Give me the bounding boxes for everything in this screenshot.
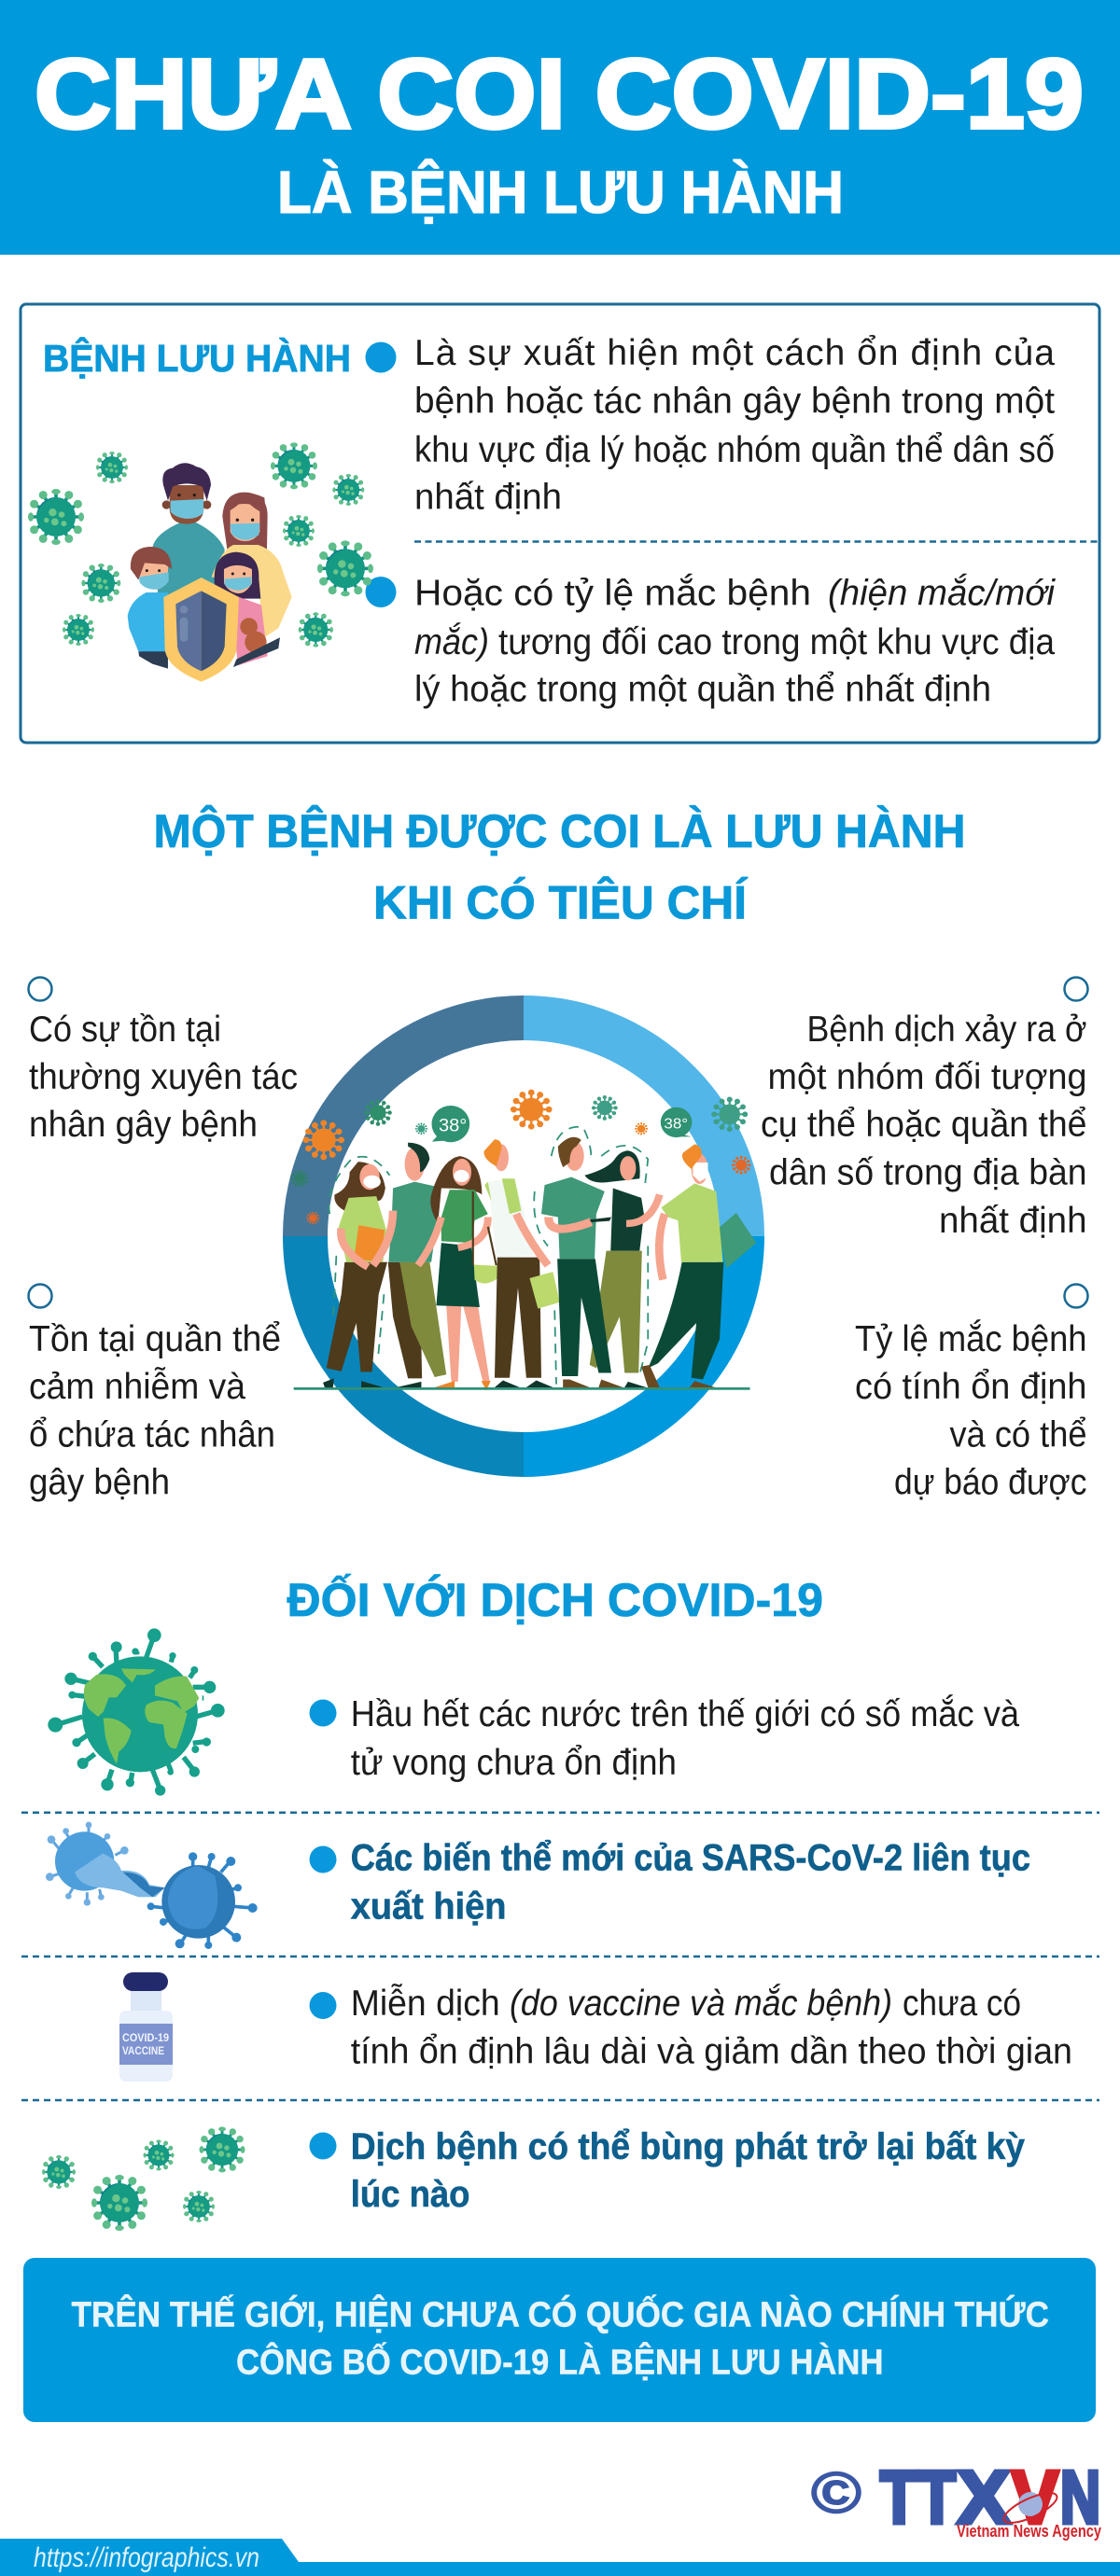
bullet and text: row 2	[310, 1838, 1030, 1927]
text block: definition 1: khu vực địa lý hoặc nhóm quần thể dân số	[414, 430, 1055, 470]
subtitle: LÀ BỆNH LƯU HÀNH	[277, 158, 844, 226]
criterion: bottom left: Tồn tại quần thể	[29, 1319, 281, 1359]
callout: conclusion	[23, 2258, 1096, 2422]
panel: definition of endemic disease	[21, 304, 1099, 743]
ring chart: four quadrants	[305, 1018, 742, 1455]
criterion: top left: Có sự tồn tại	[29, 1010, 221, 1050]
text block: definition 2: tương đối cao trong một khu vực địa	[498, 622, 1055, 662]
person 2	[373, 1143, 446, 1387]
heading: bệnh lưu hành: BỆNH LƯU HÀNH	[43, 337, 351, 380]
person 3	[418, 1156, 498, 1390]
text block: definition 2: Hoặc có tỷ lệ mắc bệnh	[414, 573, 811, 614]
bullet and text: row 1: tử vong chưa ổn định	[351, 1743, 677, 1783]
text block: definition 1	[414, 333, 1055, 517]
bullet 2	[366, 577, 396, 607]
fever bubble 1: 38°	[439, 1116, 467, 1135]
wordmark: V	[1012, 2456, 1058, 2539]
bullet and text: row 4: lúc nào	[351, 2174, 470, 2215]
header banner	[0, 0, 1120, 255]
icon: vaccine bottle	[119, 1972, 173, 2082]
bullet and text: row 3: Miễn dịch	[351, 1984, 500, 2024]
criterion: top right	[761, 978, 1088, 1241]
title: CHƯA COI COVID-19	[35, 39, 1084, 149]
criterion: bottom left: gây bệnh	[29, 1463, 170, 1503]
wordmark: TT	[880, 2456, 956, 2539]
criterion: top right: một nhóm đối tượng	[767, 1057, 1086, 1097]
person 6	[584, 1150, 660, 1387]
icon: globe virus	[48, 1628, 225, 1796]
criterion: bottom right: có tính ổn định	[855, 1367, 1086, 1407]
bullet and text: row 4	[310, 2126, 1026, 2215]
text block: definition 1: nhất định	[414, 478, 562, 517]
section heading: covid-19: ĐỐI VỚI DỊCH COVID-19	[287, 1573, 823, 1626]
criterion: bottom right: Tỷ lệ mắc bệnh	[855, 1319, 1086, 1359]
copyright mark: ©	[811, 2461, 861, 2526]
bullet and text: row 3	[310, 1984, 1072, 2071]
criterion: top left: nhân gây bệnh	[29, 1105, 258, 1145]
text block: definition 1: bệnh hoặc tác nhân gây bệnh trong một	[414, 381, 1055, 422]
criterion: top left	[28, 978, 298, 1145]
bottle label	[122, 2033, 169, 2057]
criterion: bottom left	[28, 1284, 281, 1503]
criterion: top right: nhất định	[939, 1201, 1086, 1241]
criterion: top right: Bệnh dịch xảy ra ở	[806, 1010, 1086, 1050]
criterion: bottom left: cảm nhiễm và	[29, 1367, 245, 1407]
criterion: bottom right: và có thể	[950, 1415, 1086, 1455]
criterion: top left: thường xuyên tác	[29, 1057, 298, 1097]
text block: definition 2	[414, 573, 1056, 709]
text block: definition 2: mắc)	[414, 622, 489, 662]
icon: scattered viruses	[42, 2127, 245, 2231]
illustration: group of people with viruses and fever bubbles	[290, 1090, 756, 1390]
bullet and text: row 3: tính ổn định lâu dài và giảm dần theo thời gian	[351, 2032, 1072, 2071]
section heading: criteria: KHI CÓ TIÊU CHÍ	[373, 877, 748, 929]
fever bubble 2	[661, 1107, 692, 1137]
bottle label: COVID-19	[122, 2033, 169, 2044]
icon: mutating viruses	[46, 1822, 258, 1949]
bullet and text: row 4: Dịch bệnh có thể bùng phát trở lại bất kỳ	[351, 2126, 1026, 2167]
criterion: bottom right	[855, 1284, 1088, 1503]
text block: definition 2: (hiện mắc/mới	[828, 573, 1056, 614]
criterion: bottom left: ổ chứa tác nhân	[29, 1415, 275, 1455]
person 5	[541, 1137, 623, 1387]
bullet and text: row 3: chưa có	[903, 1984, 1021, 2024]
wordmark	[880, 2456, 1100, 2539]
person 4	[483, 1139, 560, 1387]
section heading: criteria: MỘT BỆNH ĐƯỢC COI LÀ LƯU HÀNH	[153, 804, 965, 857]
person 7	[641, 1144, 756, 1387]
footer bar with url	[0, 2539, 1120, 2576]
criterion: bottom right: dự báo được	[894, 1463, 1086, 1503]
bullet and text: row 1: Hầu hết các nước trên thế giới có số mắc và	[351, 1694, 1019, 1734]
fever bubble 2: 38°	[664, 1116, 688, 1132]
section heading: criteria	[153, 804, 965, 929]
callout: conclusion: CÔNG BỐ COVID-19 LÀ BỆNH LƯU HÀNH	[236, 2341, 883, 2383]
illustration: family with shield among viruses	[28, 442, 373, 682]
wordmark: X	[958, 2456, 1010, 2539]
criterion: top right: dân số trong địa bàn	[769, 1153, 1086, 1192]
bullet and text: row 3: (do vaccine và mắc bệnh)	[510, 1984, 892, 2024]
ground line	[294, 1385, 750, 1392]
text block: definition 1: Là sự xuất hiện một cách ổn định của	[414, 333, 1055, 373]
text block: definition 2: lý hoặc trong một quần thể nhất định	[414, 670, 991, 709]
bullet and text: row 1	[310, 1694, 1019, 1783]
callout: conclusion: TRÊN THẾ GIỚI, HIỆN CHƯA CÓ QUỐC GIA NÀO CHÍNH THỨC	[71, 2293, 1049, 2334]
person 1	[323, 1162, 387, 1387]
bullet and text: row 2: xuất hiện	[351, 1886, 506, 1927]
fever bubble 1	[431, 1106, 469, 1142]
bottle label: VACCINE	[122, 2046, 164, 2057]
logo: TTXVN	[811, 2456, 1101, 2541]
footer bar with url: https://infographics.vn	[34, 2542, 259, 2573]
criterion: top right: cụ thể hoặc quần thể	[761, 1105, 1086, 1145]
wordmark: N	[1060, 2456, 1100, 2539]
bullet and text: row 2: Các biến thể mới của SARS-CoV-2 liên tục	[351, 1838, 1030, 1879]
bullet 1	[366, 341, 396, 373]
